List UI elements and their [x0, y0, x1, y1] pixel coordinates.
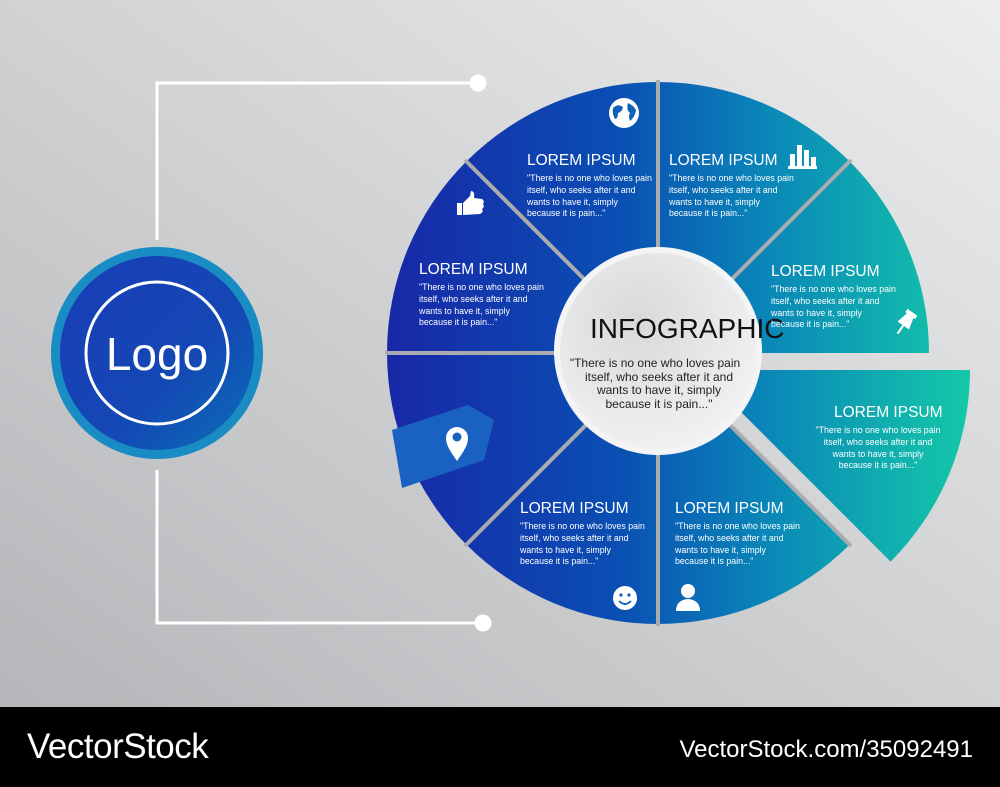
logo badge [51, 247, 263, 459]
segment texts: itself, who seeks after it and [669, 185, 778, 195]
footer [0, 707, 1000, 787]
segment texts: "There is no one who loves pain [520, 521, 645, 531]
segment texts: itself, who seeks after it and [527, 185, 636, 195]
center circle: "There is no one who loves pain [570, 356, 740, 370]
segment texts: LOREM IPSUM [675, 500, 784, 517]
center circle [554, 247, 784, 455]
icon: user [676, 584, 700, 611]
icon: globe [609, 98, 639, 128]
icon: smile [613, 586, 637, 610]
segment texts: wants to have it, simply [668, 197, 761, 207]
location tag [392, 405, 494, 488]
segment texts: wants to have it, simply [526, 197, 619, 207]
icon: thumbs up [457, 191, 484, 215]
segment texts: itself, who seeks after it and [419, 294, 528, 304]
connector lines [157, 76, 490, 630]
segment texts: "There is no one who loves pain [675, 521, 800, 531]
segment texts: "There is no one who loves pain [816, 425, 941, 435]
segment texts: because it is pain..." [669, 208, 747, 218]
center circle: wants to have it, simply [596, 383, 721, 397]
icon: pushpin [892, 308, 918, 338]
segment texts: because it is pain..." [419, 317, 497, 327]
segment texts: LOREM IPSUM [669, 152, 778, 169]
center circle: itself, who seeks after it and [585, 370, 733, 384]
segment texts: wants to have it, simply [674, 545, 767, 555]
segment texts: "There is no one who loves pain [771, 284, 896, 294]
segment texts: LOREM IPSUM [771, 263, 880, 280]
icon: bar chart [788, 145, 817, 169]
segment texts: because it is pain..." [520, 556, 598, 566]
segment texts: itself, who seeks after it and [520, 533, 629, 543]
segment texts: wants to have it, simply [770, 308, 863, 318]
segment texts: wants to have it, simply [519, 545, 612, 555]
segment texts: itself, who seeks after it and [675, 533, 784, 543]
segment texts: because it is pain..." [771, 319, 849, 329]
segment texts: "There is no one who loves pain [419, 282, 544, 292]
segment texts: itself, who seeks after it and [824, 437, 932, 447]
segmented circle [385, 80, 970, 626]
segment texts: LOREM IPSUM [520, 500, 629, 517]
footer: VectorStock [27, 727, 209, 766]
segment texts: "There is no one who loves pain [669, 173, 794, 183]
segment texts: LOREM IPSUM [419, 261, 528, 278]
segment texts: wants to have it, simply [418, 306, 511, 316]
segment texts: because it is pain..." [839, 460, 917, 470]
segment texts: because it is pain..." [527, 208, 605, 218]
segment texts: "There is no one who loves pain [527, 173, 652, 183]
segment texts: LOREM IPSUM [834, 404, 943, 421]
center circle: INFOGRAPHIC [590, 313, 784, 344]
segment texts: wants to have it, simply [832, 449, 924, 459]
footer: VectorStock.com/35092491 [679, 736, 973, 763]
segment texts: because it is pain..." [675, 556, 753, 566]
logo badge: Logo [106, 328, 208, 380]
center circle: because it is pain..." [606, 397, 712, 411]
segment texts [418, 152, 943, 566]
segment texts: LOREM IPSUM [527, 152, 636, 169]
segment texts: itself, who seeks after it and [771, 296, 880, 306]
